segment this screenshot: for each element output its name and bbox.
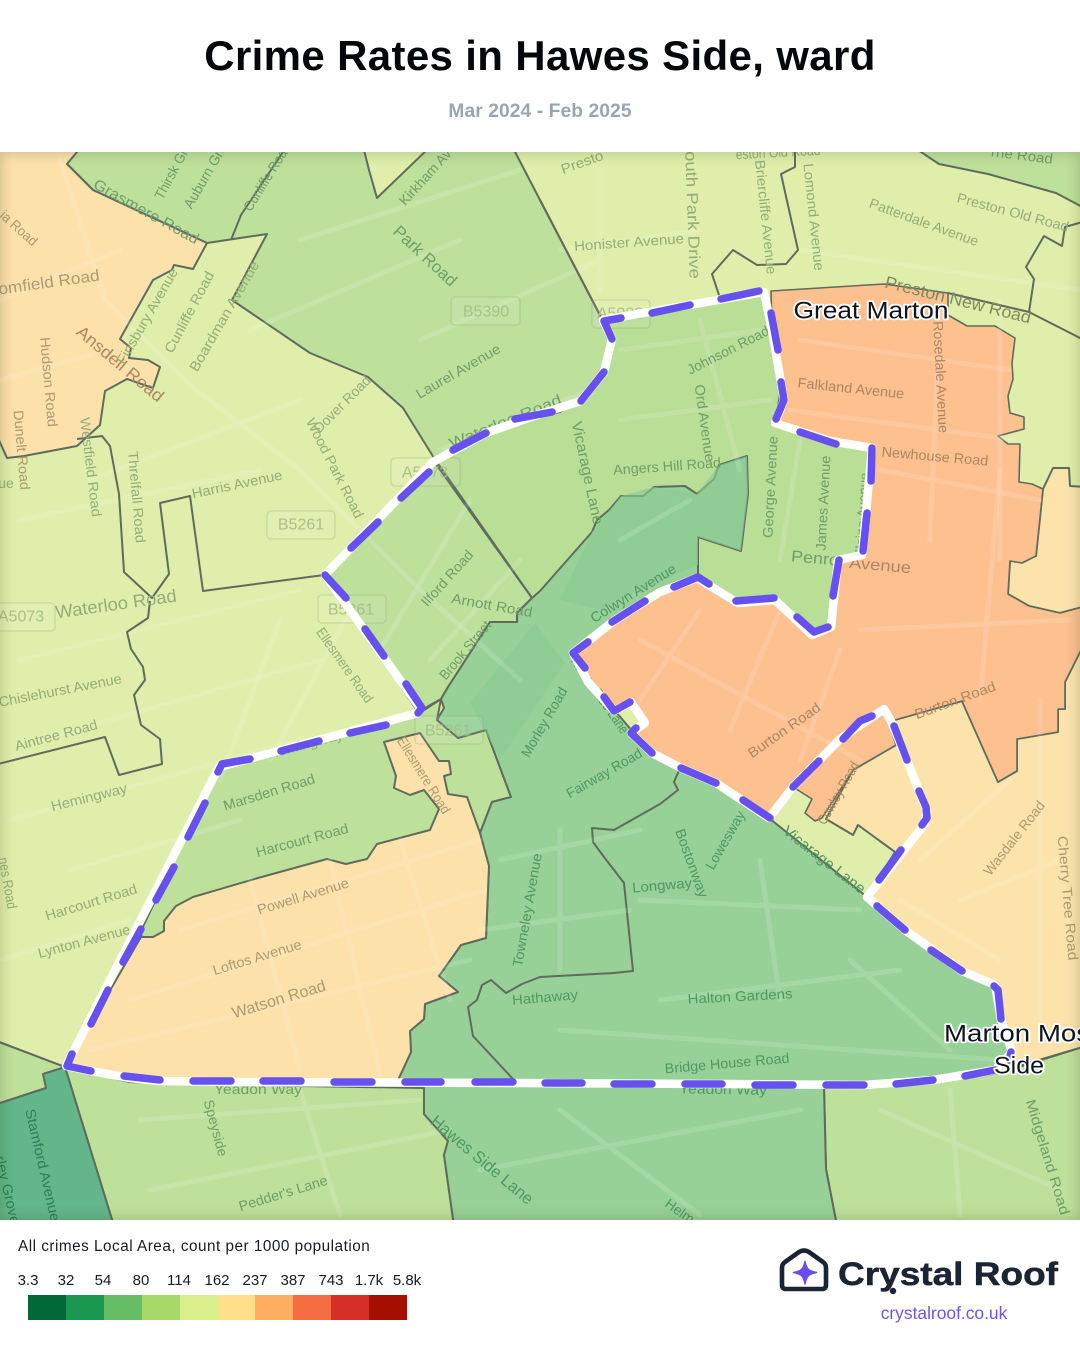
street labels: Vicarage Lane bbox=[779, 823, 869, 897]
street labels: Preston New Road bbox=[883, 273, 1033, 327]
zone: Great Marton orange bbox=[573, 284, 1080, 818]
place label: Marton Moss Side: Marton Moss bbox=[944, 1020, 1080, 1048]
road number labels: B5261 bbox=[328, 602, 374, 618]
street labels: Hemingway bbox=[49, 780, 129, 814]
street labels: Speyside bbox=[201, 1098, 231, 1158]
legend: colour scale: 5.8k bbox=[393, 1272, 421, 1289]
legend: colour scale: 743 bbox=[318, 1272, 344, 1289]
street labels: Honister Avenue bbox=[574, 230, 685, 254]
legend: colour scale bbox=[18, 1272, 422, 1320]
street labels: Waterloo Road bbox=[54, 586, 178, 622]
zone: ward north-east green bbox=[434, 292, 872, 653]
zone: ward central darker green bbox=[399, 456, 1012, 1226]
street labels: Rosedale Avenue bbox=[930, 321, 952, 434]
zone: darker park patch by Morley Road bbox=[470, 623, 565, 760]
ward boundary: Hawes Side bbox=[66, 291, 1012, 1085]
street labels: Halton Gardens bbox=[687, 985, 793, 1007]
street labels: Wood Park Road bbox=[303, 415, 367, 521]
street labels: Longway bbox=[631, 874, 693, 896]
legend title: All crimes Local Area, count per 1000 population bbox=[18, 1238, 370, 1255]
street labels: Burton Road bbox=[745, 699, 823, 761]
street labels: Watson Road bbox=[230, 978, 328, 1022]
title: Crime Rates in Hawes Side, ward bbox=[204, 32, 876, 79]
zone: ward Marsden green bbox=[139, 699, 511, 940]
zone: northern mid green area bbox=[0, 146, 1080, 1226]
street labels: Yeadon Way bbox=[679, 1080, 767, 1098]
street labels: Elaine Avenue bbox=[852, 472, 872, 558]
street labels: Lomond Avenue bbox=[800, 162, 828, 272]
road number labels: B5261 bbox=[425, 722, 471, 740]
extra ward-area boundaries bbox=[0, 146, 1080, 1067]
street labels: Dunelt Road bbox=[11, 409, 33, 491]
road number labels bbox=[0, 304, 643, 740]
zone: ward Ilford green bbox=[325, 460, 532, 712]
street labels: Pedder's Lane bbox=[237, 1172, 330, 1214]
street labels: Harris Avenue bbox=[190, 467, 284, 501]
zone: south-west dark green bbox=[0, 1067, 114, 1226]
street labels: Wasdale Road bbox=[980, 798, 1048, 878]
street labels: Morley Road bbox=[518, 684, 570, 760]
street labels: Cherry Tree Road bbox=[1055, 835, 1080, 961]
legend: colour scale: 162 bbox=[204, 1272, 230, 1289]
street labels: Lynton Avenue bbox=[36, 921, 132, 961]
subtitle: date range: Mar 2024 - Feb 2025 bbox=[448, 101, 632, 122]
street labels: Hawes Side Lane bbox=[427, 1112, 537, 1208]
place label: Great Marton: Great Marton bbox=[794, 298, 948, 324]
street labels: Loftos Avenue bbox=[211, 936, 304, 978]
street labels: Aintree Road bbox=[13, 716, 99, 754]
street labels: Angers Hill Road bbox=[613, 454, 721, 478]
road number labels: A5082 bbox=[597, 306, 643, 322]
street labels: Ord Avenue bbox=[692, 383, 718, 463]
street labels: Cowley Road bbox=[814, 759, 862, 827]
street labels: Grasmere Road bbox=[90, 176, 202, 248]
icon: Crystal Roof house logo bbox=[780, 1248, 828, 1292]
street labels: Patterdale Avenue bbox=[867, 195, 981, 249]
street labels: Dover Road bbox=[310, 372, 374, 436]
street labels: Bostonway bbox=[672, 826, 712, 900]
street labels: Burton Road bbox=[912, 678, 998, 722]
street labels: Towneley Avenue bbox=[509, 852, 545, 968]
legend: colour scale: 387 bbox=[280, 1272, 306, 1289]
place label: Marton Moss Side: Side bbox=[994, 1052, 1044, 1080]
street labels: Ilford Road bbox=[418, 547, 476, 609]
street labels: Powell Avenue bbox=[255, 874, 351, 918]
street labels: Ellesmere Road bbox=[394, 733, 454, 817]
street network bbox=[0, 160, 1080, 1215]
street labels: George Avenue bbox=[759, 435, 781, 538]
zone: inner green pocket outline bbox=[468, 768, 680, 1079]
logo wordmark: Crystal Roof bbox=[838, 1256, 1058, 1292]
street labels: Laurel Avenue bbox=[413, 340, 503, 402]
street labels: Colwyn Avenue bbox=[587, 560, 679, 626]
street labels: Park Road bbox=[389, 222, 461, 290]
street labels: Johnson Road bbox=[684, 322, 772, 378]
street labels: Hathaway bbox=[511, 986, 579, 1008]
street labels: Boardman Avenue bbox=[186, 258, 262, 374]
legend: colour scale: 1.7k bbox=[355, 1272, 383, 1289]
street labels: Threlfall Road bbox=[125, 450, 149, 544]
street labels: Midgeland Road bbox=[1023, 1097, 1073, 1217]
street labels: Hawes Side Lane bbox=[568, 654, 632, 737]
street labels: Avenue bbox=[848, 555, 912, 577]
zone: Cowley Road orange sliver bbox=[793, 709, 896, 821]
street labels: Hemingway bbox=[265, 726, 345, 762]
zone: north-west pale orange bbox=[0, 146, 207, 458]
street labels: Finsbury Avenue bbox=[113, 265, 181, 367]
panel: choropleth map bbox=[0, 152, 1080, 1220]
street labels: Newhouse Road bbox=[881, 443, 989, 469]
legend: colour scale: 54 bbox=[95, 1272, 111, 1289]
street labels: Waterloo Road bbox=[446, 391, 564, 451]
street labels: Vicarage Lane bbox=[568, 420, 606, 526]
road number labels: B5390 bbox=[463, 304, 509, 320]
legend: colour scale: 237 bbox=[242, 1272, 268, 1289]
street labels: Brook Street bbox=[436, 617, 494, 683]
road number labels: A5073 bbox=[402, 464, 448, 482]
street labels: Bridge House Road bbox=[664, 1050, 790, 1076]
road number badges bbox=[0, 297, 650, 744]
street labels: Hudson Road bbox=[37, 336, 61, 428]
street labels: James Avenue bbox=[813, 455, 833, 551]
street labels: Westfield Road bbox=[77, 416, 105, 518]
street labels: Lowesway bbox=[702, 808, 748, 872]
place label: Marton Moss Side bbox=[944, 1020, 1080, 1080]
street labels: Briercliffe Avenue bbox=[752, 159, 780, 275]
street labels: Harcourt Road bbox=[43, 880, 139, 924]
street labels: outh Park Drive bbox=[681, 152, 703, 279]
street labels: Arnott Road bbox=[450, 590, 534, 620]
street labels: Cunliffe Road bbox=[161, 269, 217, 355]
zone: Watson Road pale orange bbox=[66, 733, 489, 1085]
street labels: Ansdell Road bbox=[73, 322, 167, 406]
street labels: Falkland Avenue bbox=[797, 374, 905, 402]
street labels: Fairway Road bbox=[563, 745, 645, 801]
zone: darker patch north of Colwyn Avenue bbox=[560, 456, 748, 610]
street labels: Chislehurst Avenue bbox=[0, 670, 123, 710]
zone: bottom-right pale orange bbox=[826, 640, 1080, 1068]
street labels: Ellesmere Road bbox=[313, 624, 377, 706]
street labels: Harcourt Road bbox=[254, 820, 350, 860]
street labels: Yeadon Way bbox=[214, 1081, 302, 1097]
legend: colour scale: 32 bbox=[58, 1272, 74, 1289]
zone: east pale orange bbox=[1008, 468, 1080, 613]
street labels: Stamford Avenue bbox=[22, 1107, 64, 1220]
street labels: omfield Road bbox=[0, 267, 101, 299]
legend: colour scale: 80 bbox=[133, 1272, 149, 1289]
legend: colour scale: 3.3 bbox=[18, 1272, 38, 1289]
street labels: Preston Old Road bbox=[955, 189, 1071, 235]
road number labels: B5261 bbox=[278, 516, 324, 534]
street labels: Marsden Road bbox=[221, 770, 317, 814]
legend: colour scale: 114 bbox=[167, 1272, 191, 1289]
website url: crystalroof.co.uk bbox=[881, 1303, 1007, 1323]
street labels: Penro bbox=[790, 548, 840, 570]
